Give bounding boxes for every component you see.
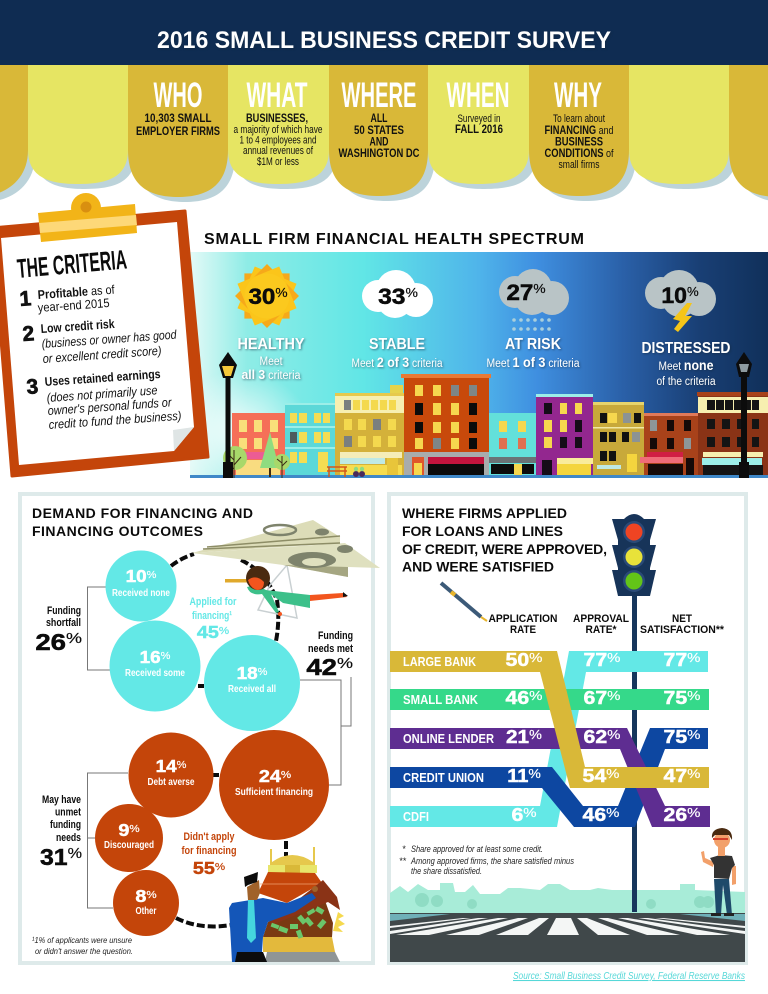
footnotes: Among approved firms, the share satisfied minus: [410, 856, 574, 866]
row values: credit union: 47: [664, 766, 687, 787]
why: To learn about: [553, 113, 605, 125]
label: distressed: [642, 340, 730, 388]
row values: cdfi: %: [606, 805, 619, 820]
criterion 3: 3: [26, 375, 39, 399]
row labels: CDFI: [403, 810, 429, 824]
circle 24% sufficient financing: 24: [259, 767, 281, 787]
row values: small bank: %: [607, 688, 620, 703]
circle 16% received some: %: [161, 650, 171, 662]
circle 24% sufficient financing: [219, 730, 329, 840]
building cyan: [285, 403, 335, 476]
label funding shortfall: shortfall: [46, 617, 81, 629]
row values: cdfi: %: [523, 805, 537, 820]
label applied for financing: [190, 596, 237, 643]
stable cloud 33%: %: [405, 286, 418, 300]
column headers: RATE: [510, 624, 536, 636]
circle 18% received all: 18: [237, 662, 258, 683]
column headers: NET: [672, 613, 692, 625]
row values: credit union: [507, 766, 700, 787]
where heading: WHERE FIRMS APPLIED: [402, 505, 567, 521]
label: healthy: Meet: [260, 356, 283, 368]
row values: small bank: 75: [664, 688, 687, 709]
illustration: hang glider woman with money plane: [192, 520, 380, 618]
bench: [327, 467, 347, 477]
circle 18% received all: Received all: [228, 684, 276, 695]
street of buildings: [190, 374, 768, 478]
lamp left: [219, 352, 237, 478]
row values: credit union: 54: [583, 766, 606, 787]
circle 16% received some: Received some: [125, 668, 185, 679]
circle 14% debt averse: Debt averse: [148, 777, 195, 788]
lamp right: [736, 352, 752, 478]
spectrum heading: SMALL FIRM FINANCIAL HEALTH SPECTRUM: [204, 231, 584, 248]
circle 8% other: [113, 870, 179, 936]
awning: [0, 65, 768, 202]
panel: the criteria clipboard: [0, 193, 208, 476]
what: BUSINESSES,: [246, 113, 308, 125]
building brown: [640, 413, 698, 476]
label didn't apply for financing: Didn't apply: [184, 831, 235, 843]
label applied for financing: financing¹: [192, 610, 232, 622]
row values: large bank: %: [529, 650, 542, 665]
criterion 3: owner's personal funds or: [47, 395, 173, 418]
column headers: APPLICATION: [488, 613, 558, 625]
circle 14% debt averse: [128, 732, 214, 818]
footnote: [32, 935, 133, 956]
header bar: [0, 0, 768, 65]
dashed flight path: [171, 554, 286, 926]
who: WHO: [154, 76, 202, 115]
where: 50 STATES: [354, 125, 404, 137]
circle 8% other: %: [146, 889, 157, 901]
label may have unmet funding needs: funding: [50, 819, 81, 831]
road with crosswalk: [390, 913, 745, 962]
why: [544, 76, 614, 171]
row values: large bank: %: [607, 650, 620, 665]
why: FINANCING and: [544, 125, 614, 137]
circle 9% discouraged: 9: [118, 821, 129, 841]
label: healthy: HEALTHY: [238, 336, 305, 353]
panel: demand for financing: [20, 494, 380, 963]
circle 9% discouraged: [95, 804, 163, 872]
what: WHAT: [246, 76, 308, 115]
illustration: man thumbs up: [701, 828, 736, 916]
footnote: or didn't answer the question.: [35, 946, 133, 956]
criterion 2: or excellent credit score): [42, 344, 162, 366]
illustration: businessman with treasure chest: [229, 847, 345, 962]
what: 1 to 4 employees and: [240, 134, 316, 146]
label: stable: STABLE: [369, 336, 425, 353]
panel: financial health spectrum background: [190, 252, 768, 478]
criterion 1: [19, 283, 115, 315]
label funding needs met: [306, 630, 353, 680]
circle 14% debt averse: 14: [156, 755, 177, 776]
circle 8% other: 8: [135, 887, 146, 907]
demand heading: FINANCING OUTCOMES: [32, 523, 203, 539]
footnotes: **: [399, 856, 407, 866]
at risk cloud 27%: %: [533, 282, 546, 296]
where: AND: [370, 136, 388, 148]
footnote: ¹1% of applicants were unsure: [32, 935, 132, 945]
circle 16% received some: [110, 620, 200, 712]
circle 9% discouraged: Discouraged: [104, 840, 154, 851]
row labels: [403, 655, 494, 824]
label funding needs met: 42: [306, 655, 337, 680]
building dark brown: [697, 392, 768, 476]
why: small firms: [558, 159, 600, 171]
label didn't apply for financing: [182, 831, 236, 879]
row values: online lender: %: [607, 727, 620, 742]
label: stable: Meet 2 of 3 criteria: [352, 354, 443, 370]
where: [338, 76, 420, 160]
row values: cdfi: %: [687, 805, 700, 820]
label may have unmet funding needs: [40, 794, 82, 871]
ribbon: small bank: [390, 689, 709, 710]
circle 18% received all: %: [258, 666, 268, 678]
stable cloud 33%: 33: [378, 284, 405, 309]
label may have unmet funding needs: 31: [40, 845, 68, 871]
ribbon: large bank: [390, 651, 709, 788]
label didn't apply for financing: %: [215, 861, 225, 873]
label didn't apply for financing: 55: [193, 859, 215, 879]
distressed cloud 10%: 10: [661, 283, 687, 308]
where: ALL: [370, 113, 388, 125]
label: at risk: Meet 1 of 3 criteria: [486, 354, 580, 370]
label may have unmet funding needs: unmet: [55, 806, 81, 818]
row values: cdfi: [511, 805, 700, 826]
building olive: [593, 402, 644, 476]
row values: online lender: %: [687, 727, 700, 742]
ribbon: credit union: [390, 728, 708, 827]
row values: cdfi: 46: [583, 805, 606, 826]
row values: small bank: %: [687, 688, 700, 703]
row values: cdfi: 6: [511, 805, 523, 826]
row labels: LARGE BANK: [403, 655, 476, 669]
building orange: [401, 374, 491, 476]
row labels: SMALL BANK: [403, 693, 478, 707]
where heading: [402, 505, 607, 574]
row values: online lender: 21: [506, 727, 529, 748]
label: healthy: [238, 336, 305, 382]
criterion 3: [26, 367, 182, 432]
row values: large bank: 50: [506, 650, 529, 671]
tree small: [274, 454, 290, 478]
row values: credit union: 11: [507, 767, 528, 787]
circle 24% sufficient financing: %: [281, 769, 291, 781]
row values: small bank: 46: [506, 688, 529, 709]
label funding shortfall: Funding: [47, 605, 81, 617]
who: [136, 76, 220, 138]
ribbon: online lender: [390, 728, 710, 827]
connector brackets: [88, 587, 351, 908]
label: distressed: DISTRESSED: [642, 340, 730, 357]
label: healthy: all 3 criteria: [242, 367, 301, 382]
demand heading: DEMAND FOR FINANCING AND: [32, 505, 253, 521]
building purple: [536, 394, 593, 476]
row values: small bank: %: [529, 688, 542, 703]
sun icon: [235, 264, 299, 328]
what: [234, 76, 322, 168]
where heading: AND WERE SATISFIED: [402, 558, 554, 574]
label may have unmet funding needs: May have: [42, 794, 81, 806]
label applied for financing: %: [219, 625, 229, 637]
criterion 1: 1: [19, 287, 32, 311]
why: BUSINESS: [555, 136, 603, 148]
label didn't apply for financing: for financing: [182, 845, 236, 857]
at risk cloud 27%: [499, 269, 569, 331]
row values: large bank: %: [687, 650, 700, 665]
paper curl: [173, 427, 194, 451]
tree round left: [223, 446, 247, 478]
circle 18% received all: [204, 635, 300, 731]
where heading: FOR LOANS AND LINES: [402, 523, 563, 539]
demand heading: [32, 505, 253, 539]
paper: [1, 222, 194, 465]
what: annual revenues of: [243, 145, 314, 157]
traffic light: [612, 514, 656, 912]
criterion 2: Low credit risk: [40, 317, 115, 336]
bushes: [353, 467, 365, 477]
what: $1M or less: [257, 156, 299, 168]
row values: large bank: [506, 650, 700, 671]
row values: small bank: [506, 688, 700, 709]
slope chart ribbons: [390, 651, 710, 827]
row values: large bank: 77: [584, 650, 607, 671]
criterion 2: [22, 317, 178, 366]
who: EMPLOYER FIRMS: [136, 126, 220, 138]
title: 2016 SMALL BUSINESS CREDIT SURVEY: [157, 27, 611, 54]
label funding shortfall: 26: [35, 630, 66, 655]
row values: online lender: [506, 727, 700, 748]
circle 16% received some: 16: [140, 646, 161, 667]
ribbon: CDFI: [390, 651, 708, 827]
column headers: SATISFACTION**: [640, 624, 725, 636]
where: WHERE: [342, 76, 416, 115]
row values: cdfi: 26: [664, 805, 687, 826]
distressed cloud 10%: [645, 270, 716, 332]
label: at risk: AT RISK: [505, 336, 561, 353]
healthy sun 30%: 30: [248, 284, 275, 309]
label funding shortfall: %: [66, 629, 82, 647]
where: WASHINGTON DC: [338, 148, 420, 160]
building gold: [335, 385, 404, 476]
who: 10,303 SMALL: [144, 113, 212, 125]
when: Surveyed in: [458, 113, 500, 125]
label may have unmet funding needs: needs: [56, 832, 81, 844]
row values: online lender: 62: [584, 727, 607, 748]
criterion 3: (does not primarily use: [46, 383, 158, 405]
distressed cloud 10%: %: [687, 284, 699, 299]
label: stable: [352, 336, 443, 370]
column headers: [488, 613, 725, 636]
footnotes: the share dissatisfied.: [411, 866, 482, 876]
circle 10% received none: [106, 550, 176, 622]
label funding shortfall: [35, 605, 82, 655]
circle 14% debt averse: %: [177, 759, 187, 771]
circle 8% other: Other: [136, 906, 157, 917]
where heading: OF CREDIT, WERE APPROVED,: [402, 541, 607, 557]
circle 10% received none: %: [147, 569, 157, 581]
label funding needs met: needs met: [308, 643, 353, 655]
criterion 1: Profitable as of: [37, 283, 115, 302]
label applied for financing: 45: [197, 623, 219, 643]
criterion 3: credit to fund the business): [48, 409, 182, 432]
what: a majority of which have: [234, 124, 322, 136]
column headers: RATE*: [586, 624, 617, 636]
pen icon: [441, 583, 487, 621]
footnotes: *: [402, 844, 406, 854]
clipboard board: [0, 211, 208, 476]
row values: credit union: %: [528, 766, 541, 781]
tree triangle: [260, 432, 279, 477]
label may have unmet funding needs: %: [68, 846, 82, 862]
circle 24% sufficient financing: Sufficient financing: [235, 787, 313, 798]
clip: [38, 193, 137, 242]
label funding needs met: %: [337, 654, 353, 672]
row values: large bank: 77: [664, 650, 687, 671]
row values: small bank: 67: [584, 688, 607, 709]
circle 9% discouraged: %: [129, 823, 140, 835]
footnotes: [399, 844, 574, 876]
row labels: ONLINE LENDER: [403, 732, 494, 746]
circle 10% received none: 10: [126, 565, 147, 586]
when: WHEN: [446, 76, 510, 115]
why: CONDITIONS of: [544, 148, 614, 160]
label: distressed: of the criteria: [656, 376, 716, 388]
building coral: [232, 413, 285, 476]
row values: credit union: %: [687, 766, 700, 781]
healthy sun 30%: %: [275, 286, 288, 300]
criterion 2: 2: [22, 322, 35, 346]
label funding needs met: Funding: [318, 630, 353, 642]
criterion 3: Uses retained earnings: [44, 367, 161, 389]
label: at risk: [486, 336, 580, 370]
panel: where firms applied: [389, 494, 746, 963]
healthy sun 30%: [235, 264, 299, 328]
when: [446, 76, 510, 136]
row values: online lender: 75: [664, 727, 687, 748]
row values: online lender: %: [529, 728, 542, 742]
row labels: CREDIT UNION: [403, 771, 484, 785]
when: FALL 2016: [455, 124, 503, 136]
criteria heading: THE CRITERIA: [16, 245, 128, 284]
footnotes: Share approved for at least some credit.: [411, 844, 543, 854]
label applied for financing: Applied for: [190, 596, 237, 608]
skyline: [390, 883, 745, 913]
label: distressed: Meet none: [658, 357, 714, 373]
row values: credit union: %: [606, 766, 619, 781]
at risk cloud 27%: 27: [506, 280, 533, 305]
why: WHY: [554, 76, 602, 115]
circle 10% received none: Received none: [112, 588, 170, 599]
building teal: [489, 413, 536, 476]
column headers: APPROVAL: [573, 613, 629, 625]
criterion 1: year-end 2015: [37, 296, 110, 315]
criterion 2: (business or owner has good: [41, 328, 178, 351]
stable cloud 33%: [362, 270, 433, 318]
